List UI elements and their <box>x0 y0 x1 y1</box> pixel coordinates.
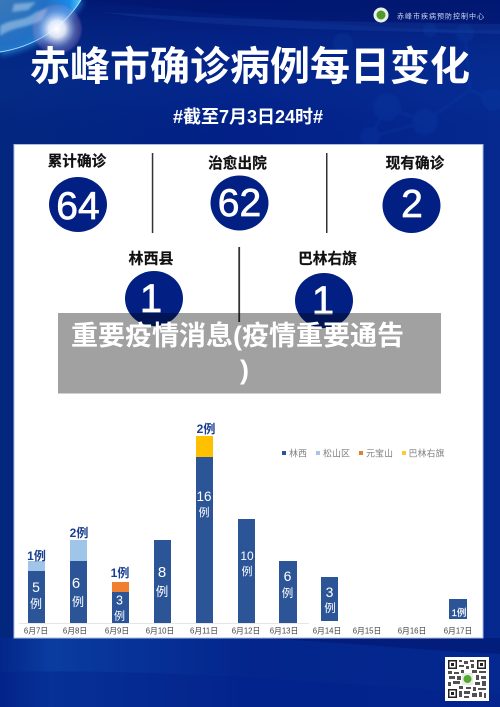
statistics: Linxi county: 林西县 <box>128 250 174 268</box>
6月8日 bars: 例 <box>72 595 84 609</box>
6月9日 bars: 3 <box>116 594 123 608</box>
x axis labels: 6月8日 <box>63 626 87 636</box>
6月7日 bars: 1例 <box>27 549 46 563</box>
6月7日 bars: 例 <box>30 597 42 611</box>
chart legend: 松山区 <box>323 448 350 458</box>
statistics: cumulative confirmed: 64 <box>56 185 100 228</box>
x axis labels: 6月15日 <box>353 626 381 636</box>
watermark banner <box>58 313 441 394</box>
QR code <box>445 657 489 701</box>
x axis labels: 6月12日 <box>232 626 260 636</box>
6月13日 bar <box>279 561 297 623</box>
6月8日 bars: 2例 <box>70 526 88 540</box>
organisation logo: 赤峰市疾病预防控制中心 <box>397 12 484 20</box>
statistics: current confirmed: 2 <box>401 183 423 226</box>
bar chart: daily cases <box>19 422 472 636</box>
x axis labels: 6月13日 <box>270 626 298 636</box>
x axis labels: 6月9日 <box>105 626 129 636</box>
6月13日 bar: 6 <box>284 568 292 584</box>
x axis labels: 6月7日 <box>24 626 48 636</box>
6月14日 bar: 3 <box>326 584 334 600</box>
date subtitle: #截至7月3日24时# <box>173 107 323 127</box>
statistics: current confirmed: 现有确诊 <box>386 154 445 172</box>
6月9日 bars <box>111 566 129 623</box>
chart legend <box>282 448 445 458</box>
6月11日 bars: 例 <box>198 505 210 519</box>
chart legend: 林西 <box>289 448 307 458</box>
watermark banner: ) <box>240 355 249 385</box>
6月17日 bar: 1例 <box>452 607 466 619</box>
6月8日 bars <box>70 526 88 623</box>
6月8日 bars: 6 <box>72 575 80 592</box>
6月13日 bar: 例 <box>282 586 293 600</box>
6月7日 bars <box>27 549 46 623</box>
6月17日 bar <box>449 599 467 619</box>
6月10日 bar <box>154 540 171 623</box>
6月10日 bar: 8 <box>158 564 166 581</box>
6月12日 bar <box>238 519 255 623</box>
statistics: discharged <box>208 154 268 230</box>
planet graphic <box>0 0 83 55</box>
6月9日 bars: 例 <box>114 608 125 622</box>
organisation logo <box>374 8 484 22</box>
x axis labels: 6月16日 <box>398 626 426 636</box>
x axis labels <box>24 626 472 636</box>
statistics: Balin Right Banner <box>295 250 357 328</box>
6月11日 bars: 2例 <box>197 422 215 436</box>
statistics: discharged: 62 <box>218 182 261 225</box>
6月11日 bars: 16 <box>196 489 212 504</box>
6月12日 bar: 10 <box>240 549 254 563</box>
chart legend: 巴林右旗 <box>408 448 445 458</box>
panel: data card <box>14 144 483 638</box>
statistics: cumulative confirmed: 累计确诊 <box>48 152 107 170</box>
x axis labels: 6月14日 <box>313 626 341 636</box>
6月12日 bar: 例 <box>242 564 252 578</box>
6月10日 bar: 例 <box>156 585 168 599</box>
statistics: Linxi county <box>125 250 183 326</box>
watermark banner: 重要疫情消息(疫情重要通告 <box>71 321 404 351</box>
x axis labels: 6月10日 <box>146 626 174 636</box>
x axis labels: 6月17日 <box>444 626 472 636</box>
statistics: Balin Right Banner: 巴林右旗 <box>298 250 357 268</box>
6月14日 bar: 例 <box>324 601 336 615</box>
title: 赤峰市确诊病例每日变化 <box>30 45 470 89</box>
statistics: Linxi county: 1 <box>140 277 162 321</box>
6月14日 bar <box>321 577 338 621</box>
6月7日 bars: 5 <box>32 579 40 595</box>
6月9日 bars: 1例 <box>111 566 129 580</box>
statistics: cumulative confirmed <box>48 152 107 232</box>
chart legend: 元宝山 <box>366 448 393 458</box>
statistics: Balin Right Banner: 1 <box>312 279 334 323</box>
statistics: discharged: 治愈出院 <box>208 154 267 172</box>
statistics: current confirmed <box>382 154 445 233</box>
x axis labels: 6月11日 <box>190 626 218 636</box>
6月11日 bars <box>196 422 215 623</box>
